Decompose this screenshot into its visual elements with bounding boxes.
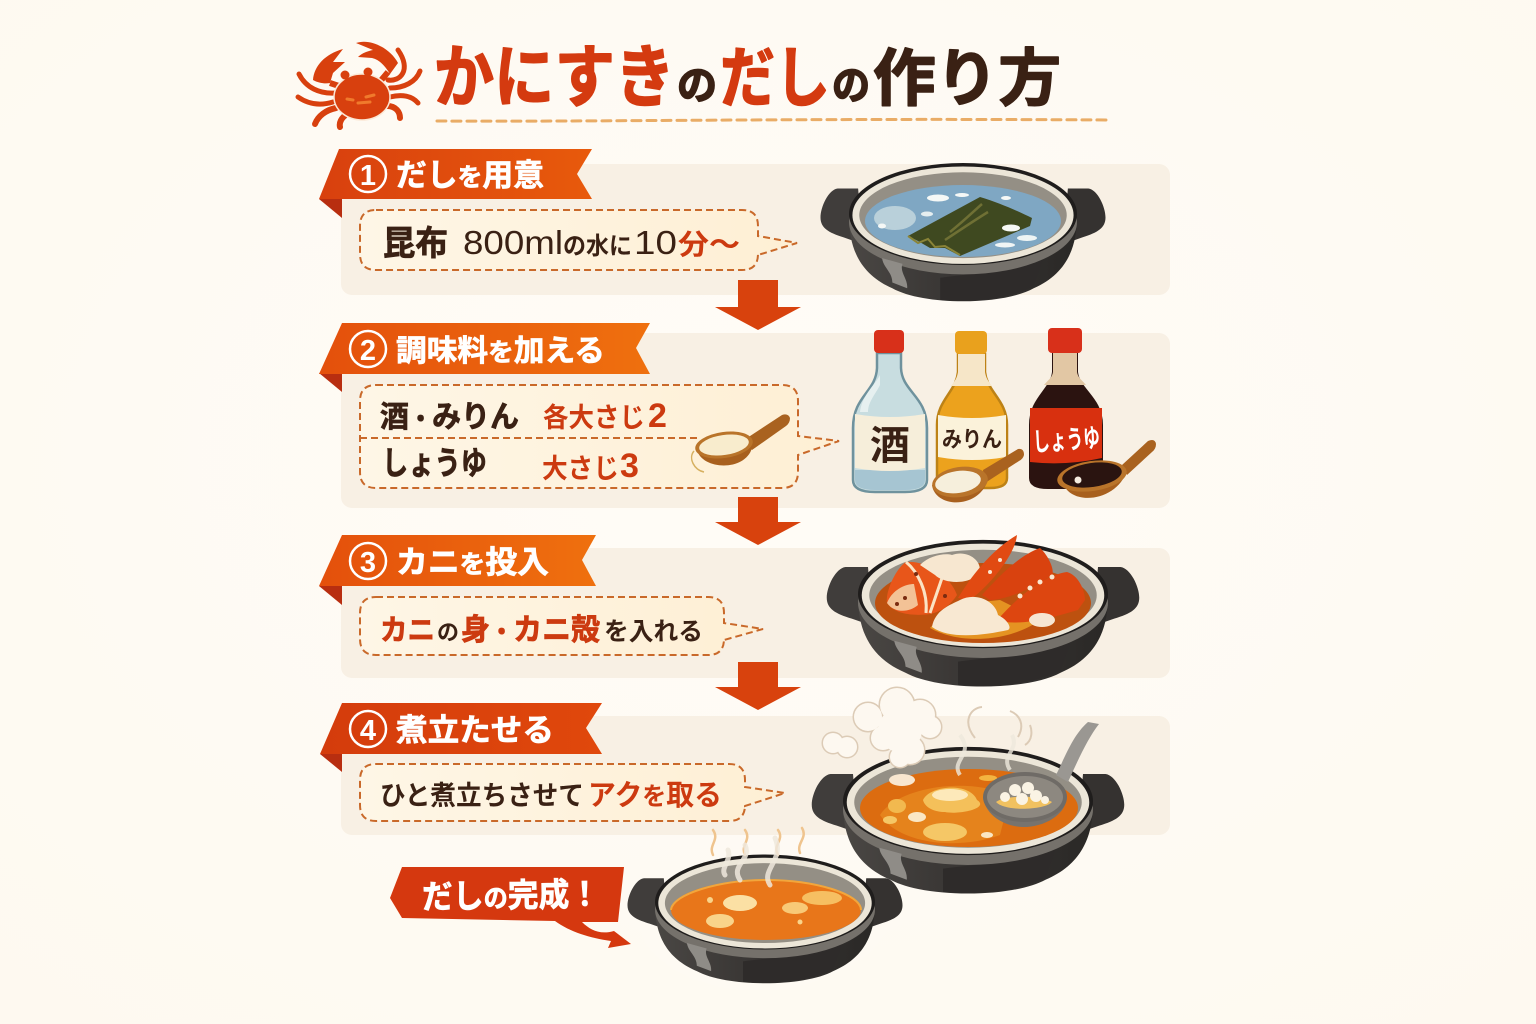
title: の <box>832 53 870 111</box>
illustration: pot with crab <box>827 535 1139 687</box>
callout: seasonings: 酒・みりん <box>380 392 519 436</box>
title: だし <box>720 25 830 121</box>
icon: soy sauce bottle: しょうゆ <box>1032 418 1101 459</box>
ribbon: step 4 heading <box>320 703 602 772</box>
callout: seasonings: しょうゆ <box>382 438 487 484</box>
icon: spoon with soy sauce <box>1055 440 1156 498</box>
ribbon: step 4 heading: 煮立たせる <box>396 705 554 750</box>
title: の <box>677 53 717 111</box>
title: かにすき <box>434 22 675 121</box>
icon: soy sauce bottle <box>1030 328 1102 488</box>
ribbon: step 4 heading: 4 <box>360 715 376 747</box>
ribbon: step 1 heading <box>319 149 592 218</box>
callout: seasonings: 各大さじ <box>543 396 645 435</box>
illustration: boiling pot with ladle and steam <box>812 688 1124 894</box>
steam <box>712 828 804 885</box>
callout: crab: 身・カニ殻 <box>461 605 600 649</box>
ribbon: step 1 heading: だしを用意 <box>396 150 544 195</box>
steam cloud <box>823 688 1031 775</box>
callout: skim: ひと煮立ちさせて <box>380 774 584 813</box>
callout: kombu: 分～ <box>678 223 740 263</box>
callout: seasonings: 2 <box>648 397 667 435</box>
ribbon: step 3 heading <box>319 535 596 605</box>
ribbon: step 3 heading: 3 <box>360 547 376 579</box>
callout: seasonings <box>360 385 839 488</box>
badge: dashi complete <box>390 867 631 948</box>
ribbon: step 2 heading <box>319 323 650 392</box>
callout: kombu <box>360 210 797 270</box>
illustration: finished dashi pot <box>625 828 904 986</box>
panel: step 4 <box>320 688 1170 894</box>
title: 作り方 <box>873 28 1061 118</box>
ribbon: step 1 heading: 1 <box>360 160 376 192</box>
callout: kombu: 800ml <box>463 224 563 261</box>
icon: sake bottle: 酒 <box>870 413 910 471</box>
arrow: step 1 to 2 <box>715 280 801 330</box>
panel: step 3 <box>319 535 1170 687</box>
callout: skim: アクを取る <box>588 772 722 814</box>
ribbon: step 2 heading: 2 <box>360 335 376 367</box>
callout: kombu: 10 <box>634 224 677 261</box>
callout: seasonings: 3 <box>620 447 639 485</box>
icon: spoon with mirin <box>930 449 1024 502</box>
arrow: step 2 to 3 <box>715 497 801 545</box>
title <box>434 22 1061 121</box>
icon: mirin bottle <box>937 331 1007 488</box>
illustration: pot with kombu in water <box>820 163 1106 301</box>
icon: sake bottle <box>853 330 927 492</box>
callout: crab: を入れる <box>604 612 703 648</box>
callout: kombu: 昆布 <box>383 216 448 265</box>
ribbon: step 2 heading: 調味料を加える <box>396 326 605 370</box>
arrow: step 3 to 4 <box>715 662 801 710</box>
callout: kombu: の水に <box>563 226 632 261</box>
callout: crab: カニ <box>380 607 435 649</box>
icon: crab <box>298 42 420 127</box>
callout: skim <box>360 764 785 821</box>
callout: crab: の <box>437 615 459 647</box>
callout: crab <box>360 597 763 655</box>
panel: step 1 <box>319 149 1170 301</box>
badge: dashi complete: だしの完成！ <box>422 867 600 919</box>
icon: measuring spoon <box>692 414 790 472</box>
ribbon: step 3 heading: カニを投入 <box>396 537 549 582</box>
callout: seasonings: 大さじ <box>542 447 619 486</box>
panel: step 2 <box>319 323 1170 986</box>
icon: mirin bottle: みりん <box>942 422 1002 454</box>
